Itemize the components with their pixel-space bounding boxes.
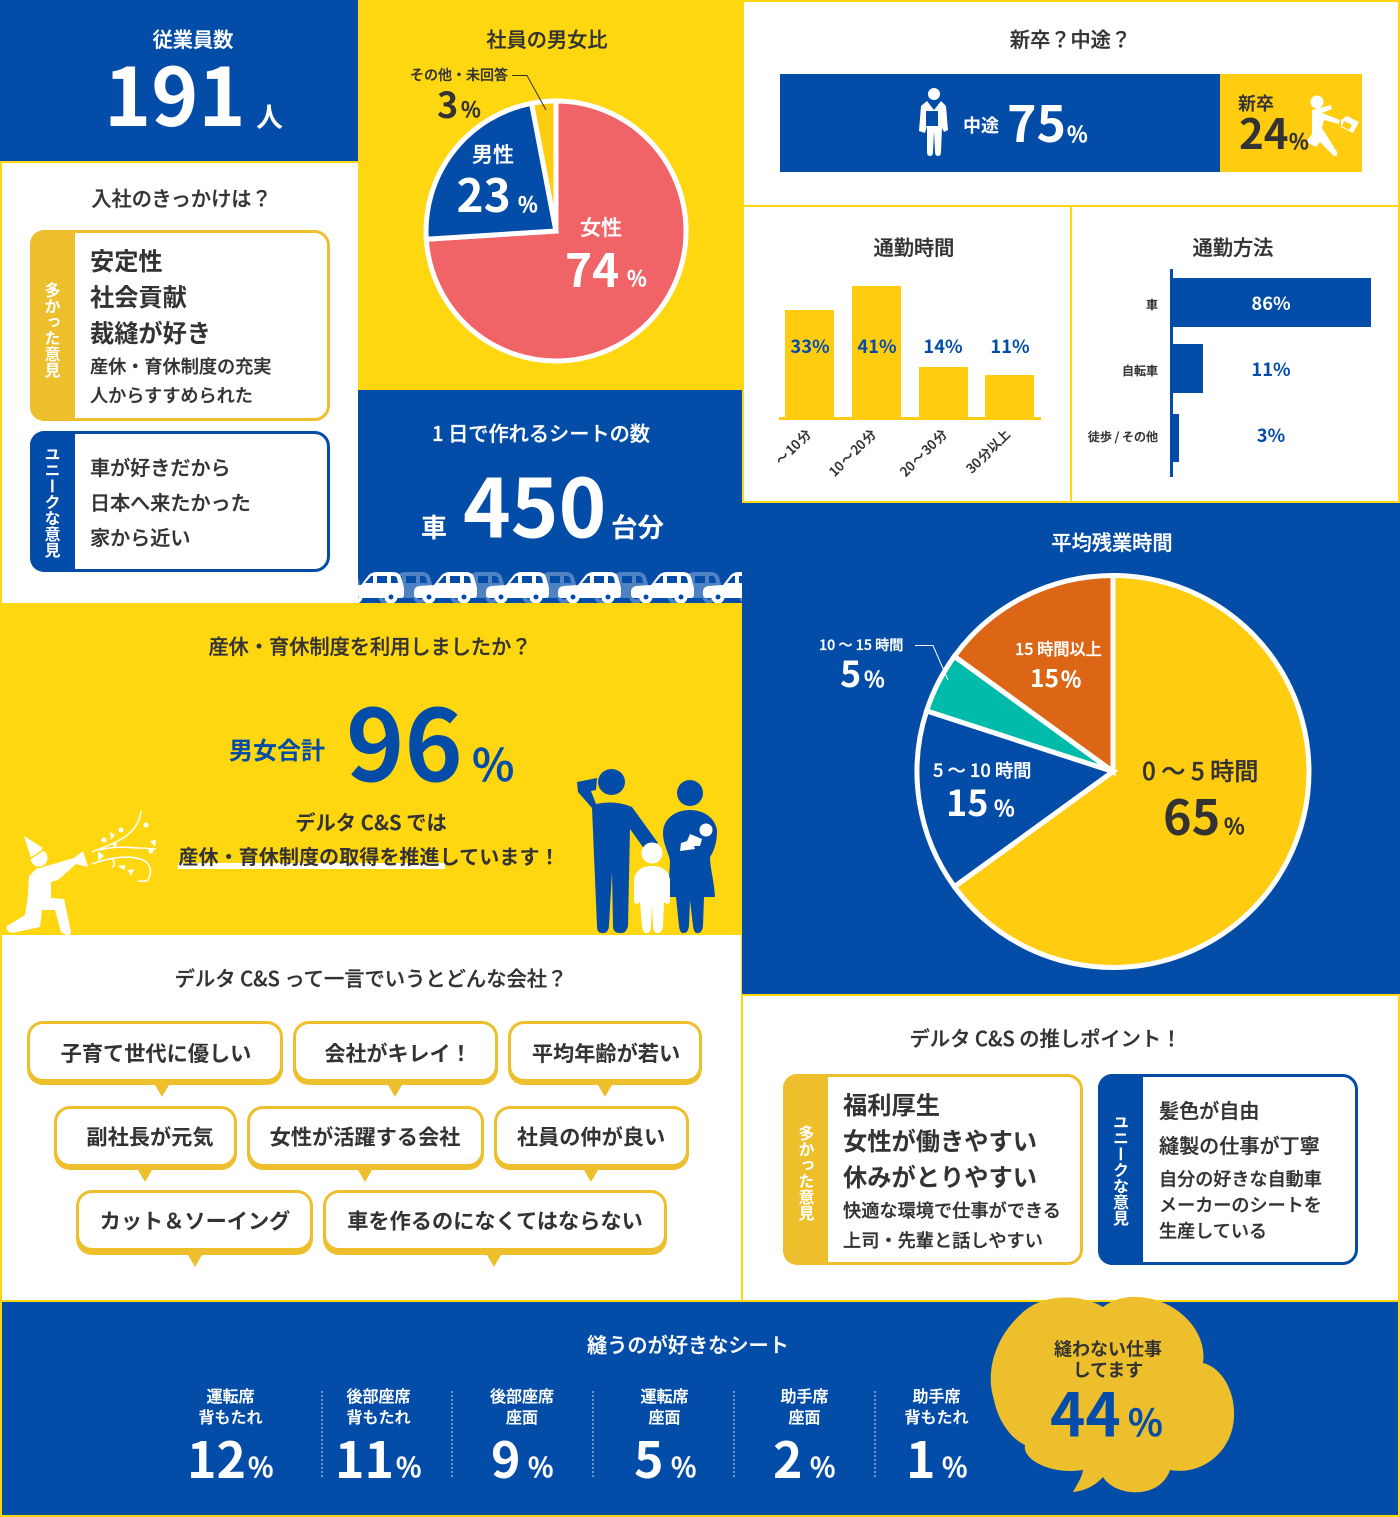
- label: male: %: [518, 189, 538, 219]
- icon: family: [577, 769, 717, 933]
- stat: rear seat cushion 9%: 後部座席: [490, 1383, 554, 1407]
- panel: favourite seats to sew: [2, 1297, 1398, 1515]
- stat: passenger seat back 1%: 1: [906, 1421, 936, 1493]
- panel: new grad vs mid-career: [744, 2, 1398, 205]
- heading: company in one word: デルタ C&S って一言でいうとどんな会社？: [175, 962, 567, 992]
- number: 96%: %: [472, 729, 514, 794]
- number: 450 cars: 車: [421, 508, 447, 545]
- stat: passenger seat back 1%: [904, 1383, 969, 1493]
- stat: rear seat cushion 9%: 座面: [506, 1404, 538, 1428]
- heading: parental leave: 産休・育休制度を利用しましたか？: [208, 631, 532, 660]
- stat: rear seat back 11%: 背もたれ: [346, 1404, 411, 1428]
- bar chart: commute time: [771, 286, 1041, 480]
- stat: passenger seat cushion 2%: %: [810, 1446, 835, 1485]
- pie chart: overtime: [917, 576, 1309, 968]
- stat: rear seat back 11%: 11: [335, 1421, 394, 1493]
- bar: mid-career 75%: [780, 74, 1220, 172]
- callout: 44% do non-sewing work: してます: [1073, 1356, 1143, 1382]
- bar chart: commute method: 車: [1146, 296, 1158, 313]
- panel: average overtime: [742, 503, 1400, 994]
- callout: 44% do non-sewing work: %: [1128, 1393, 1163, 1447]
- label: 0-5 hours: 0 ～ 5 時間: [1142, 752, 1258, 787]
- stat: rear seat cushion 9%: 9: [491, 1421, 520, 1493]
- box: common opinions: 福利厚生: [843, 1086, 940, 1121]
- speech bubble: essential for cars: [323, 1190, 667, 1267]
- box: unique opinions: 日本へ来たかった: [90, 487, 251, 516]
- bar chart: commute method: 徒歩 / その他: [1088, 428, 1158, 445]
- number: 191 people: 191: [104, 34, 246, 150]
- text: promotion message: 産休・育休制度の取得を推進しています！: [178, 841, 560, 870]
- stat: passenger seat back 1%: 助手席: [912, 1383, 961, 1407]
- box: common opinions: [30, 230, 328, 421]
- stat: driver seat back 12%: [187, 1383, 273, 1493]
- panel: reason for joining: [2, 163, 358, 603]
- bar: mid-career 75%: 中途: [963, 112, 999, 138]
- box: common opinions: 多かった意見: [794, 1125, 818, 1222]
- number: 450 cars: [421, 444, 664, 562]
- box: common opinions: 裁縫が好き: [90, 314, 211, 349]
- box: common opinions: 安定性: [90, 242, 163, 277]
- heading: favourite seats: 縫うのが好きなシート: [587, 1330, 789, 1358]
- pie chart: gender ratio: [426, 101, 686, 361]
- speech bubble: clean company: 会社がキレイ！: [324, 1038, 472, 1068]
- heading: reason for joining: 入社のきっかけは？: [91, 183, 272, 212]
- speech bubble: young average age: 平均年齢が若い: [532, 1037, 680, 1068]
- panel: commute method: [1072, 207, 1398, 501]
- bar chart: commute time: 10 ～ 20 分: [824, 424, 880, 480]
- heading: employees: 従業員数: [153, 24, 233, 53]
- label: 10-15 hours: 10 ～ 15 時間: [819, 635, 904, 655]
- bar chart: commute time: 33%: [790, 333, 830, 359]
- speech bubble: cut and sewing: [76, 1190, 313, 1267]
- bar chart: commute time: 30 分以上: [961, 424, 1014, 477]
- bar chart: commute time: 11%: [990, 333, 1030, 359]
- number: 191 people: 人: [256, 96, 283, 135]
- number: 450 cars: 台分: [611, 506, 664, 545]
- box: common opinions: 産休・育休制度の充実: [90, 353, 271, 379]
- panel: company in one word: [2, 935, 741, 1300]
- label: female: 女性: [580, 212, 622, 242]
- label: 15 hours or more: [1015, 636, 1102, 695]
- panel: recommended points: [743, 996, 1398, 1300]
- speech bubble: energetic vice president: 副社長が元気: [86, 1120, 214, 1152]
- heading: commute method: 通勤方法: [1193, 232, 1273, 261]
- callout: 44% do non-sewing work: 縫わない仕事: [1054, 1336, 1162, 1362]
- heading: recommended points: デルタ C&S の推しポイント！: [910, 1022, 1181, 1052]
- bar: new grad 24%: 24: [1239, 101, 1289, 162]
- stat: driver seat cushion 5%: 5: [634, 1421, 664, 1493]
- label: 15 hours or more: %: [1061, 663, 1081, 694]
- stat: driver seat cushion 5%: 運転席: [640, 1383, 689, 1407]
- icon: person with party horn: [7, 811, 156, 935]
- speech bubble: women active: [247, 1106, 484, 1182]
- stat: passenger seat cushion 2%: 助手席: [780, 1383, 829, 1407]
- label: 0-5 hours: 65: [1163, 779, 1220, 849]
- stat: passenger seat back 1%: 背もたれ: [904, 1404, 969, 1428]
- speech bubble: clean company: [293, 1021, 498, 1097]
- icon: man in suit: [919, 88, 948, 156]
- stat: passenger seat cushion 2%: [773, 1383, 835, 1493]
- box: unique opinions: ユニークな意見: [1109, 1114, 1133, 1227]
- bar chart: commute method: 3%: [1257, 422, 1286, 448]
- box: common opinions: 多かった意見: [40, 282, 64, 379]
- stat: passenger seat back 1%: %: [942, 1446, 967, 1485]
- box: common opinions: 人からすすめられた: [90, 382, 253, 408]
- stat: driver seat cushion 5%: %: [671, 1446, 696, 1485]
- box: unique opinions: 家から近い: [90, 522, 190, 551]
- bar chart: commute time: 14%: [923, 333, 963, 359]
- label: 10-15 hours: %: [864, 662, 885, 694]
- number: 450 cars: 450: [463, 444, 606, 562]
- stat: rear seat back 11%: [335, 1383, 421, 1493]
- stat: rear seat back 11%: %: [396, 1446, 421, 1485]
- label: 0-5 hours: [1142, 752, 1258, 849]
- heading: average overtime: 平均残業時間: [1051, 527, 1173, 556]
- panel: seats per day: [358, 390, 742, 603]
- stat: driver seat back 12%: %: [248, 1446, 273, 1485]
- label: 5-10 hours: 15: [946, 775, 988, 827]
- stat: driver seat cushion 5%: 座面: [648, 1404, 681, 1428]
- heading: new grad or mid-career: 新卒？中途？: [1010, 24, 1131, 53]
- label: 10-15 hours: 5: [840, 646, 861, 698]
- bar chart: commute time: 20 ～ 30 分: [895, 424, 951, 480]
- icon: running man with briefcase: [1306, 96, 1359, 156]
- label: 5-10 hours: 5 ～ 10 時間: [933, 757, 1031, 783]
- label: other: %: [461, 94, 481, 124]
- label: 5-10 hours: %: [994, 791, 1015, 823]
- box: unique opinions: ユニークな意見: [40, 446, 64, 559]
- icon: row of cars: [358, 572, 742, 603]
- panel: gender ratio: [358, 0, 742, 390]
- box: unique opinions: 車が好きだから: [90, 452, 231, 481]
- callout: 44% do non-sewing work: 44: [1050, 1368, 1121, 1454]
- box: common opinions: 休みがとりやすい: [843, 1158, 1037, 1193]
- stat: rear seat cushion 9%: [490, 1383, 554, 1493]
- number: 96%: [229, 666, 514, 810]
- stat: rear seat cushion 9%: %: [528, 1446, 553, 1485]
- stat: passenger seat cushion 2%: 座面: [788, 1404, 821, 1428]
- box: common opinions: 上司・先輩と話しやすい: [843, 1227, 1043, 1253]
- label: other: 3: [437, 77, 458, 129]
- box: unique opinions: [1098, 1074, 1356, 1265]
- box: common opinions: 女性が働きやすい: [843, 1122, 1037, 1157]
- speech bubble: women active: 女性が活躍する会社: [270, 1120, 460, 1152]
- box: unique opinions: メーカーのシートを: [1159, 1192, 1322, 1218]
- speech bubble: friendly staff: 社員の仲が良い: [517, 1120, 665, 1152]
- speech bubble: friendly staff: [494, 1106, 689, 1182]
- box: unique opinions: 髪色が自由: [1159, 1095, 1259, 1124]
- speech bubble: cut and sewing: カット＆ソーイング: [100, 1204, 290, 1236]
- bar: new grad 24%: [1220, 74, 1362, 172]
- label: 10-15 hours: [819, 635, 948, 698]
- box: unique opinions: 生産している: [1159, 1218, 1267, 1244]
- label: 15 hours or more: 15 時間以上: [1015, 636, 1102, 660]
- callout: 44% do non-sewing work: [991, 1297, 1234, 1492]
- bar chart: commute method: [1088, 269, 1371, 477]
- heading: seats per day: 1 日で作れるシートの数: [432, 418, 650, 447]
- number: 96%: 96: [346, 666, 463, 810]
- label: male: 男性: [472, 139, 514, 169]
- label: male: [456, 139, 538, 226]
- number: 96%: 男女合計: [229, 731, 325, 766]
- speech bubble: energetic vice president: [54, 1106, 237, 1182]
- bar: new grad 24%: 新卒: [1238, 90, 1274, 116]
- box: unique opinions: 自分の好きな自動車: [1159, 1166, 1322, 1192]
- label: female: %: [627, 263, 647, 293]
- stat: driver seat back 12%: 背もたれ: [198, 1404, 263, 1428]
- label: female: 74: [565, 235, 619, 301]
- panel: employees: [0, 0, 358, 161]
- label: 0-5 hours: %: [1224, 809, 1245, 841]
- panel: commute time: [744, 207, 1070, 501]
- bar chart: commute time: ～ 10 分: [771, 424, 815, 469]
- bar: mid-career 75%: %: [1067, 117, 1088, 149]
- bar chart: commute time: 41%: [857, 333, 897, 359]
- label: 5-10 hours: [933, 757, 1031, 827]
- bar: mid-career 75%: 75: [1007, 85, 1066, 157]
- stat: driver seat back 12%: 12: [187, 1421, 246, 1493]
- bar chart: commute method: 11%: [1251, 356, 1291, 382]
- stat: passenger seat cushion 2%: 2: [773, 1421, 802, 1493]
- label: male: 23: [456, 160, 511, 226]
- stat: driver seat back 12%: 運転席: [206, 1383, 255, 1407]
- label: female: [565, 212, 647, 301]
- speech bubble: essential for cars: 車を作るのになくてはならない: [347, 1204, 643, 1236]
- bar chart: commute method: 86%: [1251, 290, 1291, 316]
- speech bubble: family-friendly: 子育て世代に優しい: [61, 1037, 251, 1068]
- speech bubble: family-friendly: [27, 1021, 283, 1097]
- bar chart: commute method: 自転車: [1122, 362, 1158, 379]
- label: other: [410, 65, 546, 129]
- box: unique opinions: 縫製の仕事が丁寧: [1159, 1130, 1320, 1159]
- heading: commute time: 通勤時間: [874, 232, 954, 261]
- box: common opinions: 社会貢献: [90, 278, 187, 313]
- panel: parental leave: [0, 603, 742, 935]
- speech bubble: young average age: [508, 1021, 702, 1097]
- bar: new grad 24%: %: [1289, 126, 1309, 156]
- text: promotion message: デルタ C&S では: [295, 806, 447, 836]
- stat: driver seat cushion 5%: [634, 1383, 696, 1493]
- text: promotion message: [178, 806, 560, 870]
- stat: rear seat back 11%: 後部座席: [346, 1383, 411, 1407]
- label: other: その他・未回答: [410, 65, 508, 85]
- heading: gender ratio: 社員の男女比: [486, 24, 608, 53]
- box: unique opinions: [30, 431, 328, 572]
- box: common opinions: 快適な環境で仕事ができる: [843, 1197, 1061, 1223]
- box: common opinions: [783, 1074, 1082, 1265]
- label: 15 hours or more: 15: [1030, 660, 1059, 695]
